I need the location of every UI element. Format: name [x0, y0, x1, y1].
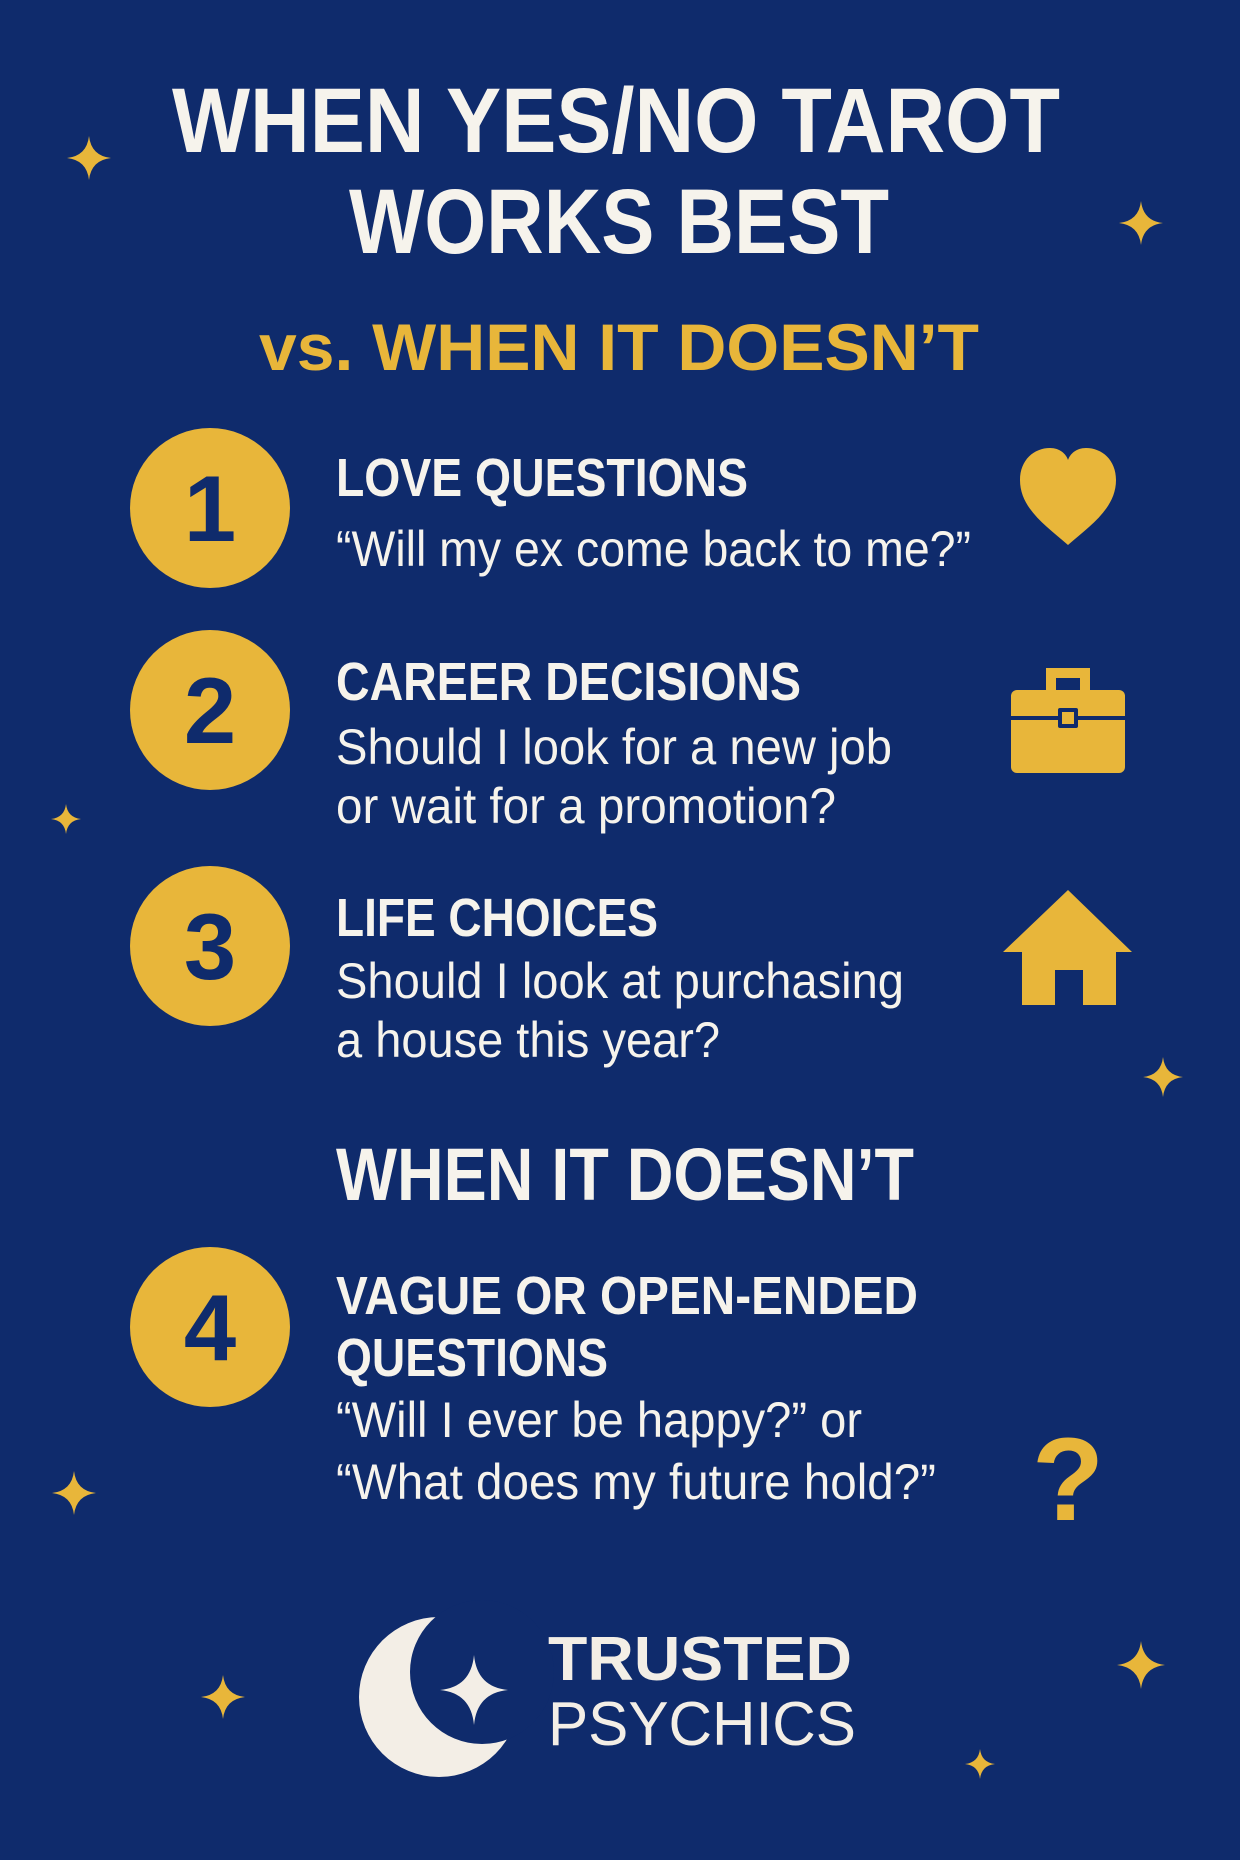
title [172, 70, 1060, 273]
title: WHEN YES/NO TAROT [172, 70, 1060, 172]
item 1: love questions: “Will my ex come back to me?” [336, 521, 971, 577]
item 4: vague questions: VAGUE OR OPEN-ENDED [336, 1266, 918, 1326]
logo: trusted psychics: PSYCHICS [548, 1690, 856, 1759]
item 4: vague questions: “What does my future hold?” [336, 1454, 936, 1510]
logo: trusted psychics [359, 1600, 856, 1777]
item 1: love questions: LOVE QUESTIONS [336, 448, 748, 508]
item 2: career decisions: Should I look for a new job [336, 719, 892, 775]
icon: briefcase [1011, 668, 1125, 773]
item 2: career decisions: or wait for a promotion? [336, 778, 836, 834]
item 3: life choices: LIFE CHOICES [336, 888, 658, 948]
title: WORKS BEST [349, 171, 889, 273]
item 3: life choices: a house this year? [336, 1012, 720, 1068]
item 4: vague questions: 4 [184, 1275, 236, 1380]
icon: heart [1020, 448, 1116, 545]
subtitle: vs. when it doesn't: vs. WHEN IT DOESN’T [259, 310, 979, 384]
item 4: vague questions: “Will I ever be happy?” or [336, 1392, 862, 1448]
item 1: love questions [130, 428, 971, 588]
item 2: career decisions: 2 [184, 658, 236, 763]
item 4: vague questions: QUESTIONS [336, 1328, 608, 1388]
item 4: vague questions [130, 1247, 936, 1510]
icon: house [1003, 890, 1132, 1005]
item 2: career decisions: CAREER DECISIONS [336, 652, 801, 712]
heading: when it doesn't: WHEN IT DOESN’T [336, 1133, 914, 1216]
logo: trusted psychics: TRUSTED [548, 1625, 852, 1694]
icon: question mark: ? [1032, 1414, 1104, 1546]
item 3: life choices [130, 866, 904, 1068]
item 1: love questions: 1 [184, 456, 236, 561]
item 2: career decisions [130, 630, 892, 834]
item 3: life choices: Should I look at purchasing [336, 953, 904, 1009]
item 3: life choices: 3 [184, 894, 236, 999]
